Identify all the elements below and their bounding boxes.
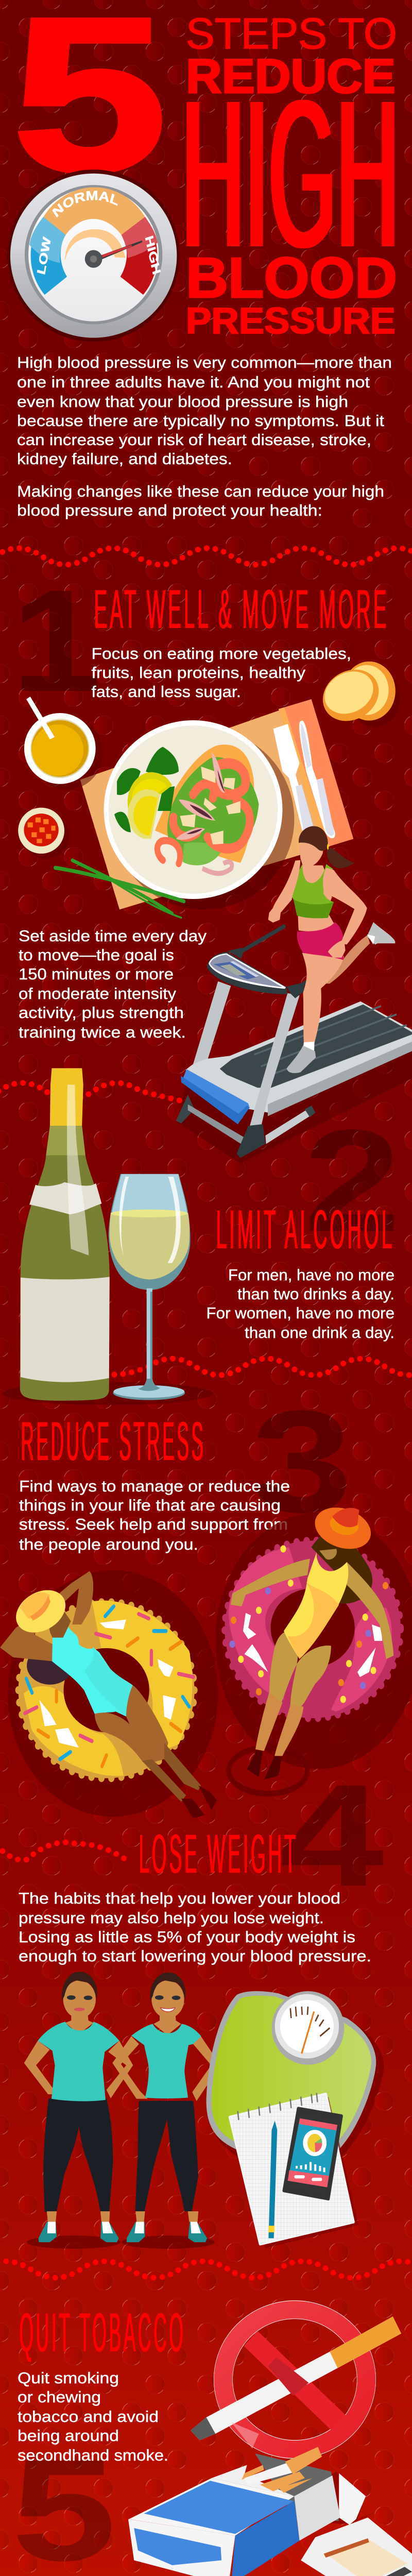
step 4 text: Losing as little as 5% of your body weight is <box>19 1928 355 1946</box>
bathroom scale <box>207 1991 384 2156</box>
step 1 numeral: 1 <box>11 560 102 722</box>
step 4 text: enough to start lowering your blood pressure. <box>19 1947 371 1965</box>
title: STEPS TO <box>186 9 397 58</box>
step 1 diet text: fats, and less sugar. <box>92 683 241 701</box>
intro paragraph: High blood pressure is very common—more than <box>17 354 392 371</box>
step 3 text: stress. Seek help and support from <box>19 1516 288 1533</box>
step 4 numeral: 4 <box>279 1755 385 1917</box>
gauge label: low: LOW <box>35 236 54 276</box>
title: REDUCE <box>186 49 396 103</box>
step 1 activity text: 150 minutes or more <box>19 965 174 983</box>
step 1 diet text <box>92 645 351 701</box>
step 1 activity text: activity, plus strength <box>19 1004 184 1022</box>
sauce bowl <box>24 697 102 790</box>
step 5 text: Quit smoking <box>18 2369 119 2387</box>
plate <box>104 720 294 909</box>
gauge label: normal: NORMAL <box>52 191 118 217</box>
salsa bowl <box>18 808 69 859</box>
treadmill and runner <box>176 826 412 1163</box>
title: HIGH <box>179 57 397 292</box>
step 1 activity text: training twice a week. <box>19 1024 186 1041</box>
no smoking sign with cigarette <box>191 2301 401 2459</box>
green onions <box>55 860 184 918</box>
woman on pink donut float <box>215 1513 412 1794</box>
intro paragraph: even know that your blood pressure is high <box>17 393 348 411</box>
step 1 activity text: to move—the goal is <box>19 946 174 964</box>
sun hat red <box>312 1502 374 1555</box>
gauge label: high: HIGH <box>143 234 163 276</box>
notepad, pencil and phone <box>230 2094 358 2248</box>
intro paragraph: because there are typically no symptoms. But it <box>17 412 385 430</box>
step 1 activity text: Set aside time every day <box>19 927 207 945</box>
wine bottle <box>3 1068 213 1405</box>
step 4 text <box>19 1890 371 1965</box>
step 4 text: The habits that help you lower your blood <box>19 1890 340 1907</box>
intro paragraph: kidney failure, and diabetes. <box>17 450 232 468</box>
title: PRESSURE <box>186 301 396 342</box>
step 2 numeral: 2 <box>304 1100 401 1262</box>
parsley <box>114 747 179 832</box>
step 3 text <box>19 1478 290 1553</box>
intro paragraph: one in three adults have it. And you might not <box>17 374 370 391</box>
runner <box>268 826 395 1073</box>
blood pressure gauge <box>7 170 180 342</box>
title: BLOOD <box>186 246 397 310</box>
step 1 diet text: Focus on eating more vegetables, <box>92 645 351 663</box>
step 3 text: the people around you. <box>19 1536 198 1553</box>
wine glass <box>109 1174 191 1400</box>
treadmill <box>176 926 412 1163</box>
step 3 numeral: 3 <box>251 1380 352 1543</box>
step 5 text <box>18 2369 168 2464</box>
placemat <box>80 699 353 909</box>
intro paragraph: blood pressure and protect your health: <box>17 502 322 519</box>
step 2 text: than two drinks a day. <box>237 1285 394 1303</box>
step 3 text: Find ways to manage or reduce the <box>19 1478 290 1495</box>
woman before weight loss <box>24 1972 133 2249</box>
bread slices <box>318 662 400 728</box>
step 1 activity text: of moderate intensity <box>19 985 177 1003</box>
step 3 text: things in your life that are causing <box>19 1497 281 1514</box>
step 2 text: For men, have no more <box>228 1266 394 1284</box>
matchbook <box>301 2518 412 2576</box>
step 5 text: secondhand smoke. <box>18 2447 168 2464</box>
cigarette pack <box>128 2447 379 2576</box>
step 4 text: pressure may also help you lose weight. <box>19 1909 324 1927</box>
woman after weight loss <box>112 1973 220 2249</box>
step 2 text: than one drink a day. <box>245 1324 394 1342</box>
step 2 text: For women, have no more <box>206 1304 394 1322</box>
food illustration <box>18 662 400 918</box>
step 5 text: being around <box>18 2427 119 2445</box>
cutlery <box>273 721 335 838</box>
intro paragraph <box>17 354 392 519</box>
step 5 text: or chewing <box>18 2388 101 2406</box>
step 2 text <box>206 1266 394 1342</box>
step 5 text: tobacco and avoid <box>18 2408 159 2426</box>
lemon slices <box>128 772 172 839</box>
step 1 diet text: fruits, lean proteins, healthy <box>92 664 306 682</box>
woman on yellow donut float <box>0 1570 218 1818</box>
intro paragraph: Making changes like these can reduce your high <box>17 483 384 500</box>
intro paragraph: can increase your risk of heart disease, stroke, <box>17 431 371 449</box>
step 1 activity text <box>19 927 207 1041</box>
